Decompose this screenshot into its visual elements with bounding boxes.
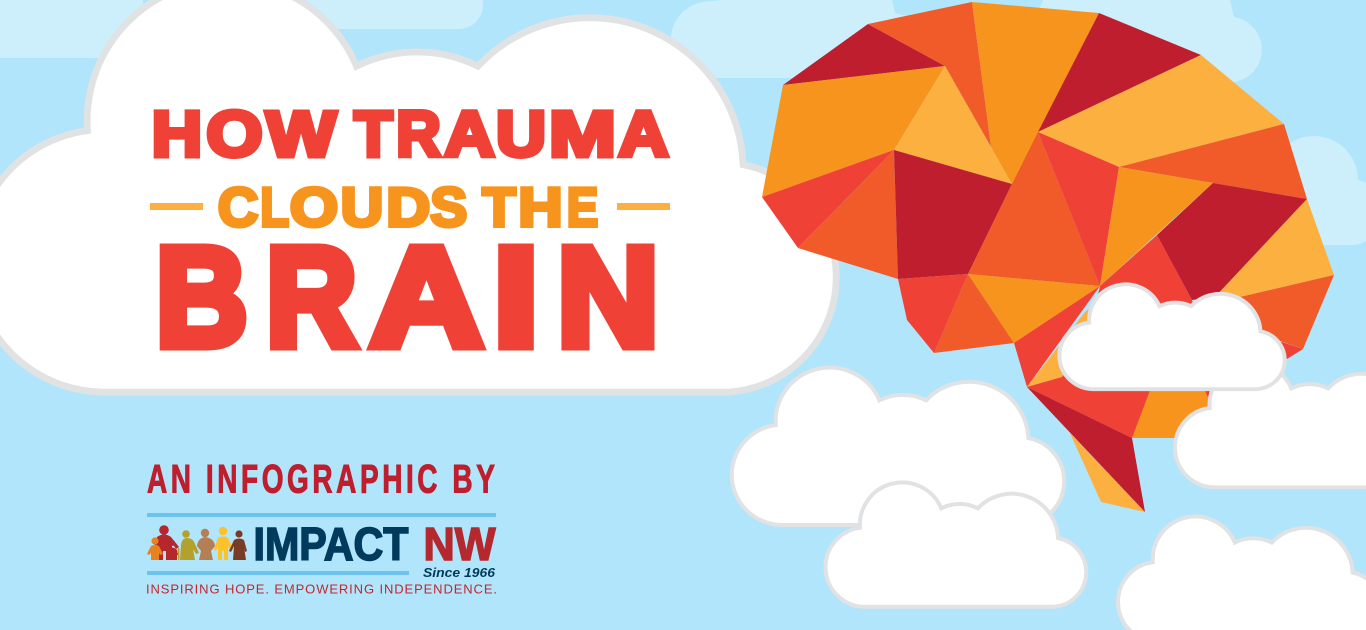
title — [150, 98, 670, 376]
title line: how trauma: W — [266, 98, 337, 170]
title line: brain: N — [557, 218, 659, 376]
title line: how trauma: A — [618, 98, 668, 170]
title line: clouds the: E — [567, 176, 598, 238]
byline heading: AN INFOGRAPHIC BY — [147, 458, 495, 502]
title line: clouds the: S — [430, 176, 467, 238]
title line: brain — [156, 218, 659, 376]
logo tagline: INSPIRING HOPE. EMPOWERING INDEPENDENCE. — [146, 582, 497, 596]
title line: brain: A — [370, 218, 483, 376]
white cloud: lower left — [732, 368, 1064, 525]
logo wordmark: impact: IMPACT — [254, 518, 408, 570]
title line: clouds the: L — [260, 176, 289, 238]
title line: how trauma: M — [549, 98, 616, 170]
title line: clouds the: O — [290, 176, 338, 238]
title line: clouds the: H — [518, 176, 563, 238]
title line: how trauma: A — [444, 98, 494, 170]
logo wordmark: nw: NW — [424, 518, 496, 570]
title line: clouds the: D — [386, 176, 430, 238]
title line: clouds the: C — [218, 176, 258, 238]
icon: family of people — [147, 525, 247, 560]
title line: brain: B — [156, 218, 248, 376]
title line: brain: I — [493, 218, 539, 376]
white cloud: right — [1175, 362, 1366, 487]
title line: how trauma: T — [354, 98, 392, 170]
title line: how trauma: O — [206, 98, 262, 170]
title line: brain: R — [266, 218, 357, 376]
title line: clouds the: U — [341, 176, 383, 238]
polygon brain — [762, 2, 1334, 512]
title line: how trauma: R — [396, 98, 441, 170]
title line: clouds the — [218, 176, 598, 238]
white cloud: over brain — [1059, 284, 1285, 389]
logo: since 1966: Since 1966 — [423, 566, 496, 580]
title line: clouds the: T — [482, 176, 516, 238]
white cloud: bottom right — [1118, 516, 1366, 630]
title line: how trauma: U — [496, 98, 546, 170]
title line: how trauma: H — [152, 98, 202, 170]
main title cloud — [0, 0, 836, 392]
white cloud: bottom centre — [825, 482, 1086, 607]
title line: how trauma — [152, 98, 669, 170]
pale background clouds — [0, 0, 1366, 245]
logo: Impact NW — [146, 513, 497, 596]
title dashes — [150, 203, 670, 210]
